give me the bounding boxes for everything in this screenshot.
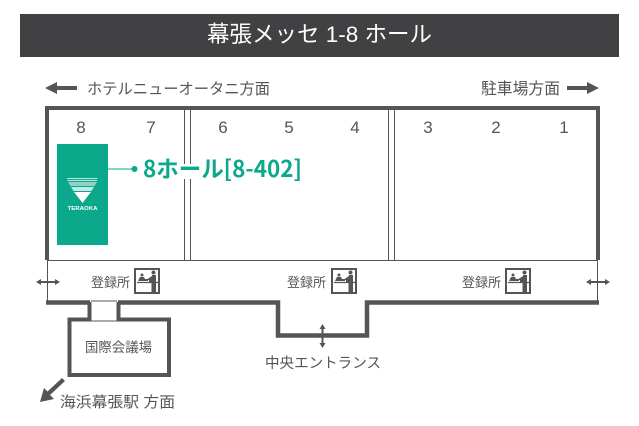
icon: registration desk: [506, 269, 530, 293]
arrow: to Kaihin-Makuhari station: [40, 378, 65, 402]
arrow: right side passage: [586, 279, 610, 285]
hall numbers: 6: [218, 118, 228, 137]
hall numbers: 4: [350, 118, 360, 137]
conference hall: [70, 301, 169, 375]
registration 2: 登録所: [287, 275, 326, 290]
booth: Teraoka: [57, 144, 108, 245]
icon: Teraoka logo: TERAOKA: [68, 206, 98, 212]
lower wall and central entrance: [46, 302, 599, 336]
hall numbers: 2: [491, 118, 501, 137]
hall numbers: 3: [423, 118, 433, 137]
icon: registration desk: [332, 269, 356, 293]
hall floor outline: [47, 108, 598, 301]
label: central entrance: 中央エントランス: [265, 355, 381, 372]
icon: registration desk: [135, 269, 159, 293]
callout: booth number: 8ホール[8-402]: [143, 150, 302, 184]
hall numbers: 5: [284, 118, 294, 137]
registration 3: [462, 269, 530, 293]
direction label: parking: 駐車場方面: [481, 80, 560, 98]
hall numbers: [76, 118, 569, 137]
registration 2: [287, 269, 356, 293]
direction label: parking: [481, 80, 599, 98]
label: Kaihin-Makuhari station direction: 海浜幕張駅 方面: [60, 394, 175, 411]
title bar: 幕張メッセ 1-8 ホール: [207, 22, 432, 47]
title bar: [20, 14, 619, 57]
registration 1: [91, 269, 159, 293]
registration 3: 登録所: [462, 275, 501, 290]
conference hall: 国際会議場: [85, 340, 152, 355]
arrow: left side passage: [36, 279, 60, 285]
hall numbers: 1: [559, 118, 569, 137]
hall numbers: 8: [76, 118, 86, 137]
hall numbers: 7: [146, 118, 156, 137]
registration 1: 登録所: [91, 275, 130, 290]
direction label: Hotel New Otani: ホテルニューオータニ方面: [87, 81, 270, 98]
arrow: central entrance: [320, 324, 326, 348]
